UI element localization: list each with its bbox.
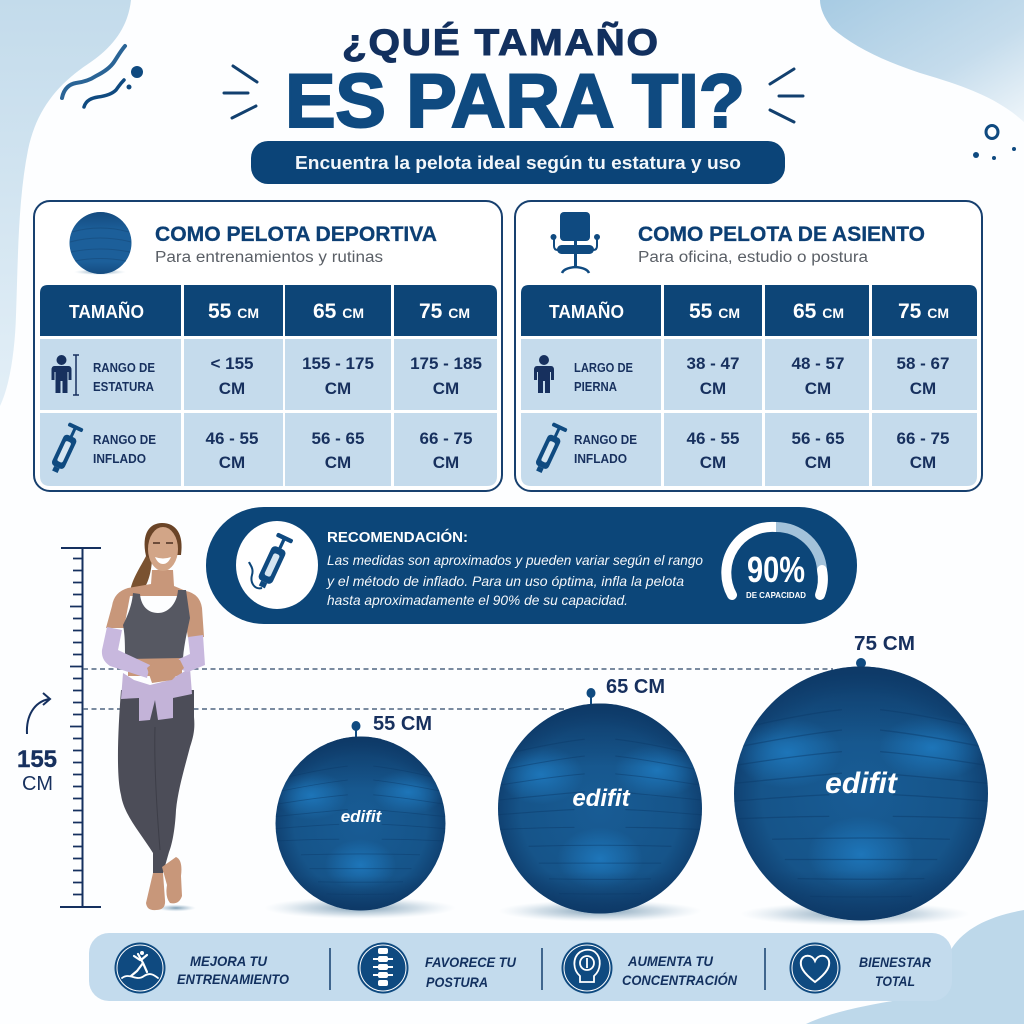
recommendation text: Las medidas son aproximados y pueden variar según el rango <box>327 552 703 568</box>
benefit: mejora tu entrenamiento <box>114 942 166 994</box>
table header <box>521 285 977 336</box>
height label <box>17 746 57 795</box>
recommendation text: y el método de inflado. Para un uso óptima, infla la pelota <box>326 573 684 589</box>
background blob: top left <box>0 0 131 406</box>
ball 55 cm: edifit <box>341 807 383 826</box>
table header <box>40 285 497 336</box>
table row: largo de pierna <box>521 339 977 410</box>
recommendation text: hasta aproximadamente el 90% de su capacidad. <box>327 592 628 608</box>
sleeve right <box>176 635 205 672</box>
foot right <box>162 857 182 903</box>
ruler <box>60 548 101 907</box>
table row: largo de pierna: 58 - 67 <box>897 354 949 373</box>
table row: rango de inflado: CM <box>700 453 726 472</box>
table row: rango de estatura: ESTATURA <box>93 380 154 394</box>
tank top <box>123 590 190 659</box>
decoration: circles top right <box>973 126 1016 160</box>
leggings <box>118 690 194 873</box>
table header: TAMAÑO <box>69 301 144 322</box>
subheading: Para oficina, estudio o postura <box>638 249 868 266</box>
table row: rango de inflado: 56 - 65 <box>792 429 844 448</box>
subtitle pill: Encuentra la pelota ideal según tu estatura y uso <box>295 153 741 173</box>
table row: largo de pierna: 48 - 57 <box>792 354 844 373</box>
waist <box>128 656 182 676</box>
table header: 65 CM <box>313 300 364 323</box>
ground shadow <box>156 904 196 912</box>
table row: rango de inflado: CM <box>433 453 459 472</box>
decoration: squiggles <box>62 46 143 107</box>
hair <box>145 523 182 558</box>
title: ¿QUÉ TAMAÑO <box>342 21 658 64</box>
table row: rango de inflado: CM <box>325 453 351 472</box>
hands <box>147 660 184 683</box>
ball 55 cm <box>264 713 456 919</box>
background blob: bottom right <box>806 910 1024 1024</box>
woman figure <box>102 523 205 912</box>
subheading: Para entrenamientos y rutinas <box>155 249 383 266</box>
heading: COMO PELOTA DEPORTIVA <box>155 223 437 246</box>
subtitle pill <box>251 141 785 184</box>
table header: 75 CM <box>419 300 470 323</box>
table row: rango de inflado: 66 - 75 <box>897 429 949 448</box>
panel: como pelota deportiva <box>34 201 502 491</box>
leg seam <box>155 727 160 850</box>
table row: rango de estatura <box>40 339 497 410</box>
gauge 90% <box>726 527 823 600</box>
table row: rango de inflado: RANGO DE <box>93 433 156 447</box>
benefit label: MEJORA TU <box>190 953 268 969</box>
gauge 90%: 90% <box>747 549 805 590</box>
icon: chair <box>550 212 600 273</box>
table header: TAMAÑO <box>549 301 624 322</box>
benefit: aumenta tu concentracion <box>562 942 612 994</box>
recommendation text <box>326 552 703 608</box>
height arrow <box>27 693 50 734</box>
table header: 75 CM <box>898 300 949 323</box>
ball 65 cm <box>498 676 702 922</box>
table row: rango de estatura: 175 - 185 <box>410 354 482 373</box>
title <box>285 21 745 144</box>
table row: rango de inflado: 46 - 55 <box>687 429 739 448</box>
table row: rango de estatura: < 155 <box>210 354 254 373</box>
sleeve left <box>102 627 150 678</box>
table header: 55 CM <box>689 300 740 323</box>
table row: rango de inflado: 46 - 55 <box>206 429 258 448</box>
tied sweater <box>121 668 192 721</box>
dashed reference lines <box>83 669 833 709</box>
benefit label: TOTAL <box>875 973 915 989</box>
benefit label <box>425 954 517 990</box>
table row: rango de inflado: 56 - 65 <box>312 429 364 448</box>
benefits band <box>89 933 952 1001</box>
heading: COMO PELOTA DE ASIENTO <box>638 223 925 246</box>
table row: largo de pierna: PIERNA <box>574 380 617 394</box>
table row: rango de inflado: INFLADO <box>574 452 627 466</box>
benefit label: AUMENTA TU <box>627 953 714 969</box>
benefit: favorece tu postura <box>358 942 408 994</box>
ponytail <box>130 552 152 596</box>
table row: rango de inflado: RANGO DE <box>574 433 637 447</box>
ball 75 cm: 75 CM <box>854 633 915 655</box>
table row: largo de pierna: CM <box>805 379 831 398</box>
ball 75 cm <box>734 633 988 926</box>
title: ES PARA TI? <box>285 59 745 144</box>
ball 65 cm: edifit <box>572 785 631 812</box>
benefit label <box>622 953 738 988</box>
table header: 55 CM <box>208 300 259 323</box>
face <box>148 527 178 571</box>
table row: rango de estatura: RANGO DE <box>93 361 155 375</box>
skin: neck, shoulders, arms <box>106 570 204 638</box>
benefit label: BIENESTAR <box>859 954 932 970</box>
table header: 65 CM <box>793 300 844 323</box>
table row: largo de pierna: LARGO DE <box>574 361 633 375</box>
table row: rango de inflado: 66 - 75 <box>420 429 472 448</box>
panel: como pelota de asiento <box>515 201 982 491</box>
table row: rango de inflado: CM <box>219 453 245 472</box>
table row: rango de estatura: CM <box>433 379 459 398</box>
eyes and smile <box>153 543 173 564</box>
table row: rango de estatura: CM <box>219 379 245 398</box>
table row: rango de estatura: 155 - 175 <box>302 354 374 373</box>
table row: rango de inflado: INFLADO <box>93 452 146 466</box>
icon: pump in circle <box>236 521 318 609</box>
table row: largo de pierna: CM <box>700 379 726 398</box>
benefit label: CONCENTRACIÓN <box>622 971 738 988</box>
height label: 155 <box>17 746 57 773</box>
benefit: bienestar total <box>790 942 840 994</box>
height label: CM <box>22 773 53 795</box>
decoration: title rays <box>224 66 803 122</box>
foot left <box>146 873 165 910</box>
ball 55 cm: 55 CM <box>373 713 432 735</box>
table row: rango de inflado: CM <box>910 453 936 472</box>
table row: rango de inflado <box>521 413 977 486</box>
table row: largo de pierna: 38 - 47 <box>687 354 739 373</box>
recommendation panel <box>206 507 857 624</box>
ball 65 cm: 65 CM <box>606 676 665 698</box>
table row: rango de inflado: CM <box>805 453 831 472</box>
benefit label: FAVORECE TU <box>425 954 517 970</box>
benefit label <box>859 954 932 989</box>
table row: largo de pierna: CM <box>910 379 936 398</box>
table row: rango de inflado <box>40 413 497 486</box>
benefit label: POSTURA <box>426 974 488 990</box>
background blob: top right <box>820 0 1024 122</box>
recommendation heading: RECOMENDACIÓN: <box>327 528 468 546</box>
ball 75 cm: edifit <box>825 767 899 800</box>
benefit label: ENTRENAMIENTO <box>177 971 289 987</box>
table row: rango de estatura: CM <box>325 379 351 398</box>
benefit label <box>177 953 289 987</box>
icon: ball <box>70 212 132 275</box>
gauge 90%: DE CAPACIDAD <box>746 590 806 600</box>
